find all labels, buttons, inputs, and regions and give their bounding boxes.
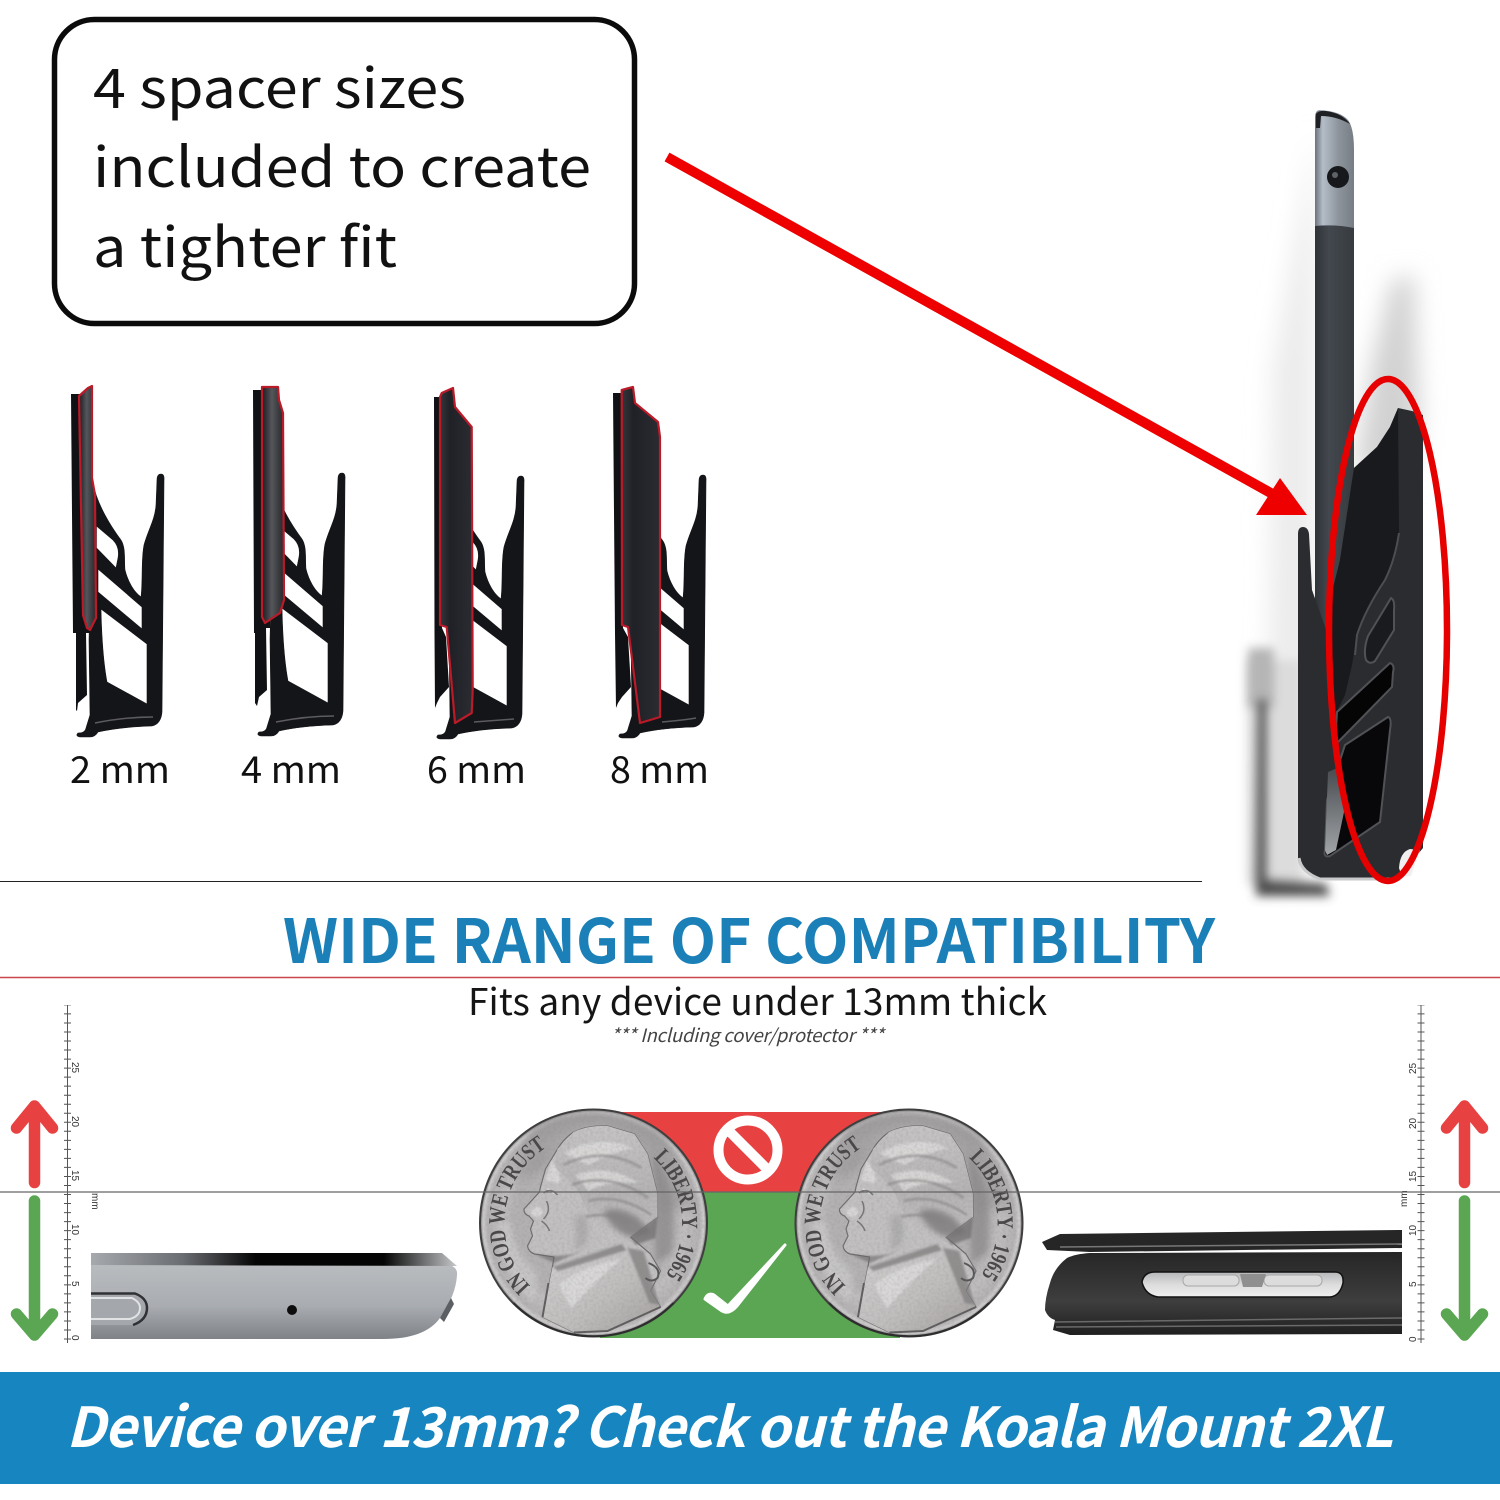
note: *** Including cover/protector *** — [611, 1022, 886, 1048]
divider line — [0, 880, 1202, 882]
callout: spacer sizes — [54, 20, 634, 324]
coin: left nickel — [479, 1108, 708, 1338]
spacer clip: 4 mm — [241, 387, 345, 794]
right ruler: 10 — [1408, 1224, 1419, 1236]
right ruler: mm — [1399, 1190, 1410, 1207]
arrows right: too thick / fits — [1446, 1106, 1482, 1335]
mount body — [1298, 408, 1423, 879]
spacer clip: 6 mm: 6 mm — [427, 740, 526, 794]
13 mm limit line — [0, 1191, 1500, 1193]
subheading: Fits any device under 13mm thick — [468, 972, 1048, 1026]
photo: tablet mounted with spacer — [1247, 110, 1423, 896]
red rule — [0, 976, 1500, 978]
coin: right nickel — [794, 1108, 1024, 1338]
coin: right nickel: LIBERTY · 1965 — [969, 1148, 1013, 1282]
spacer clip: 2 mm: 2 mm — [70, 740, 170, 794]
spacer clip: 2 mm — [70, 386, 170, 794]
left ruler: mm — [89, 1193, 100, 1210]
right ruler: 15 — [1408, 1170, 1419, 1182]
wall shadows — [1247, 130, 1420, 896]
icon: prohibited — [718, 1120, 778, 1180]
right ruler: 20 — [1408, 1117, 1419, 1129]
heading: compatibility: WIDE RANGE OF COMPATIBILITY — [283, 892, 1216, 981]
right ruler — [1399, 1005, 1421, 1343]
callout: spacer sizes: 4 spacer sizes — [93, 44, 466, 124]
right ruler: 25 — [1408, 1062, 1419, 1074]
left ruler — [68, 1005, 100, 1343]
device: tablet in folio case — [1042, 1230, 1402, 1335]
spacer clip: 6 mm — [427, 388, 526, 794]
tablet edge — [1315, 110, 1354, 865]
red arrow to spacer — [667, 157, 1307, 515]
red highlight ellipse — [1329, 379, 1447, 881]
banner: Device over 13mm? Check out the Koala Mount 2XL — [66, 1383, 1393, 1463]
spacer clip: 8 mm: 8 mm — [610, 740, 709, 794]
left ruler: 20 — [69, 1116, 80, 1128]
right ruler: 5 — [1408, 1281, 1419, 1287]
left ruler: 0 — [69, 1335, 80, 1341]
left ruler: 15 — [69, 1170, 80, 1182]
coin: left nickel: IN GOD WE TRUST — [489, 1135, 544, 1296]
spacer clip: 4 mm: 4 mm — [241, 740, 341, 794]
spacer clip: 8 mm — [610, 387, 709, 794]
left ruler: 25 — [69, 1062, 80, 1074]
callout: spacer sizes: included to create — [93, 123, 591, 203]
coin: right nickel: IN GOD WE TRUST — [804, 1135, 860, 1296]
icon: check mark — [705, 1245, 785, 1312]
left ruler: 5 — [69, 1281, 80, 1287]
arrows left: too thick / fits — [16, 1106, 52, 1335]
right ruler: 0 — [1408, 1336, 1419, 1342]
device: tablet edge without case — [91, 1253, 457, 1339]
coin: left nickel: LIBERTY · 1965 — [654, 1148, 698, 1282]
banner — [0, 1372, 1500, 1484]
size band: red too thick, green fits — [600, 1112, 900, 1338]
callout: spacer sizes: a tighter fit — [93, 203, 397, 283]
left ruler: 10 — [69, 1224, 80, 1236]
